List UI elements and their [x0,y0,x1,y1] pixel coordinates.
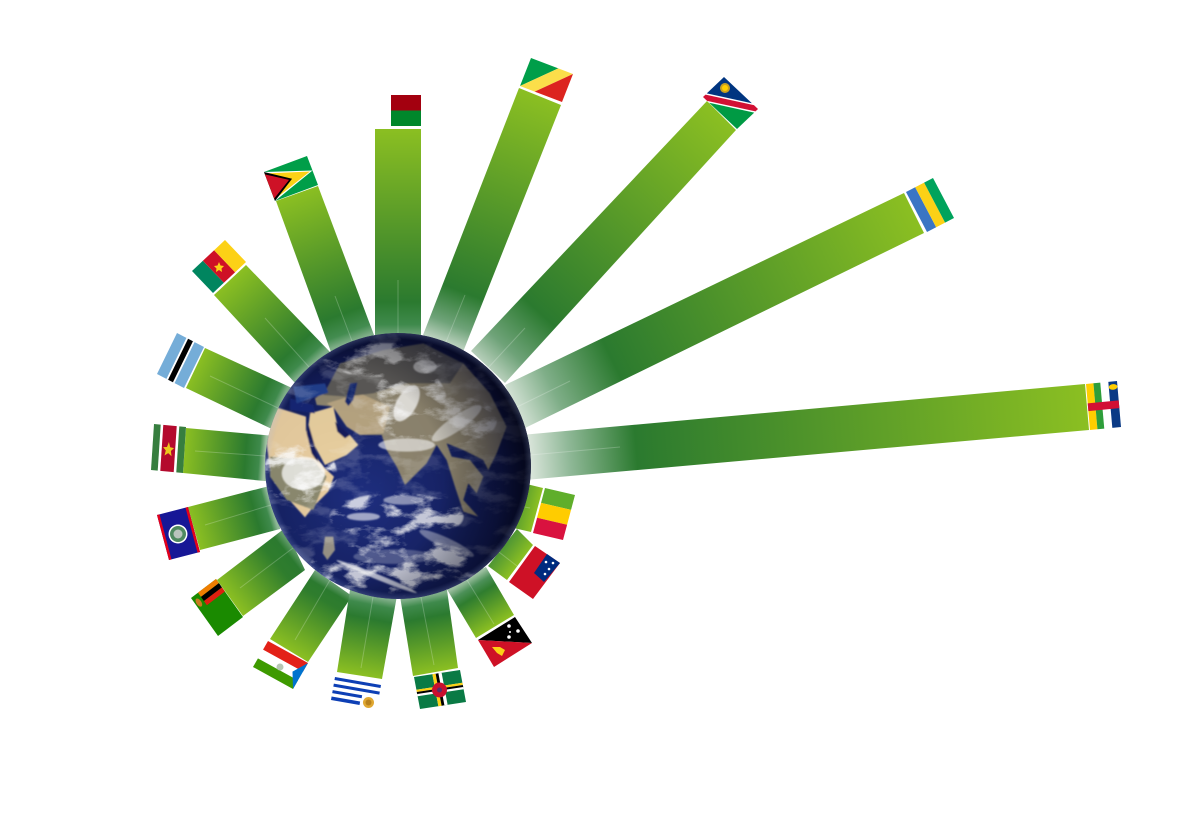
faint centre lines on bars [195,280,620,668]
flag: Uruguay [331,677,381,708]
bar: Congo [423,88,561,352]
bar: Samoa [488,529,533,580]
flag: Guyana [264,156,318,201]
flag: Burkina [391,95,421,126]
flag: Samoa [509,546,560,599]
bar: Papua New Guinea [445,567,514,638]
bar: Dominica [399,590,458,676]
bar: Burkina [375,129,421,344]
bar: Gabon [505,193,924,428]
flag: Papua New Guinea [478,617,532,667]
clouds texture [265,333,531,599]
bar: Central African Republic [510,384,1089,481]
flag: Botswana [157,333,204,388]
flag: Zambia [191,579,243,636]
flag: Dominica [414,670,466,709]
globe: Earth [265,333,531,599]
limb shading [312,333,531,599]
bar: Botswana [186,348,292,431]
flag: Equatorial Guinea [253,641,308,689]
bar: Guyana [276,186,374,352]
infographic: radial bars with flags around globe [151,58,1121,709]
flag: Benin [533,488,575,540]
bar: Zambia [217,528,305,616]
flag: Suriname [151,424,186,473]
bar: Suriname [183,428,275,482]
bar: Cameroon [214,265,330,384]
bar: Uruguay [337,590,398,679]
flag: Gabon [906,178,954,232]
flag: Belize [157,507,200,560]
flag: Central African Republic [1086,381,1121,430]
atmosphere rim [265,333,531,599]
flag: Namibia [703,77,758,129]
bar: Equatorial Guinea [270,570,352,662]
bar: Namibia [471,101,736,383]
ocean [265,333,531,599]
bar: Belize [188,484,280,550]
bar: Benin [500,480,543,532]
continents [267,343,507,560]
flag: Cameroon [192,240,246,293]
flag: Congo [520,58,573,102]
clouds: large formations [282,360,485,595]
